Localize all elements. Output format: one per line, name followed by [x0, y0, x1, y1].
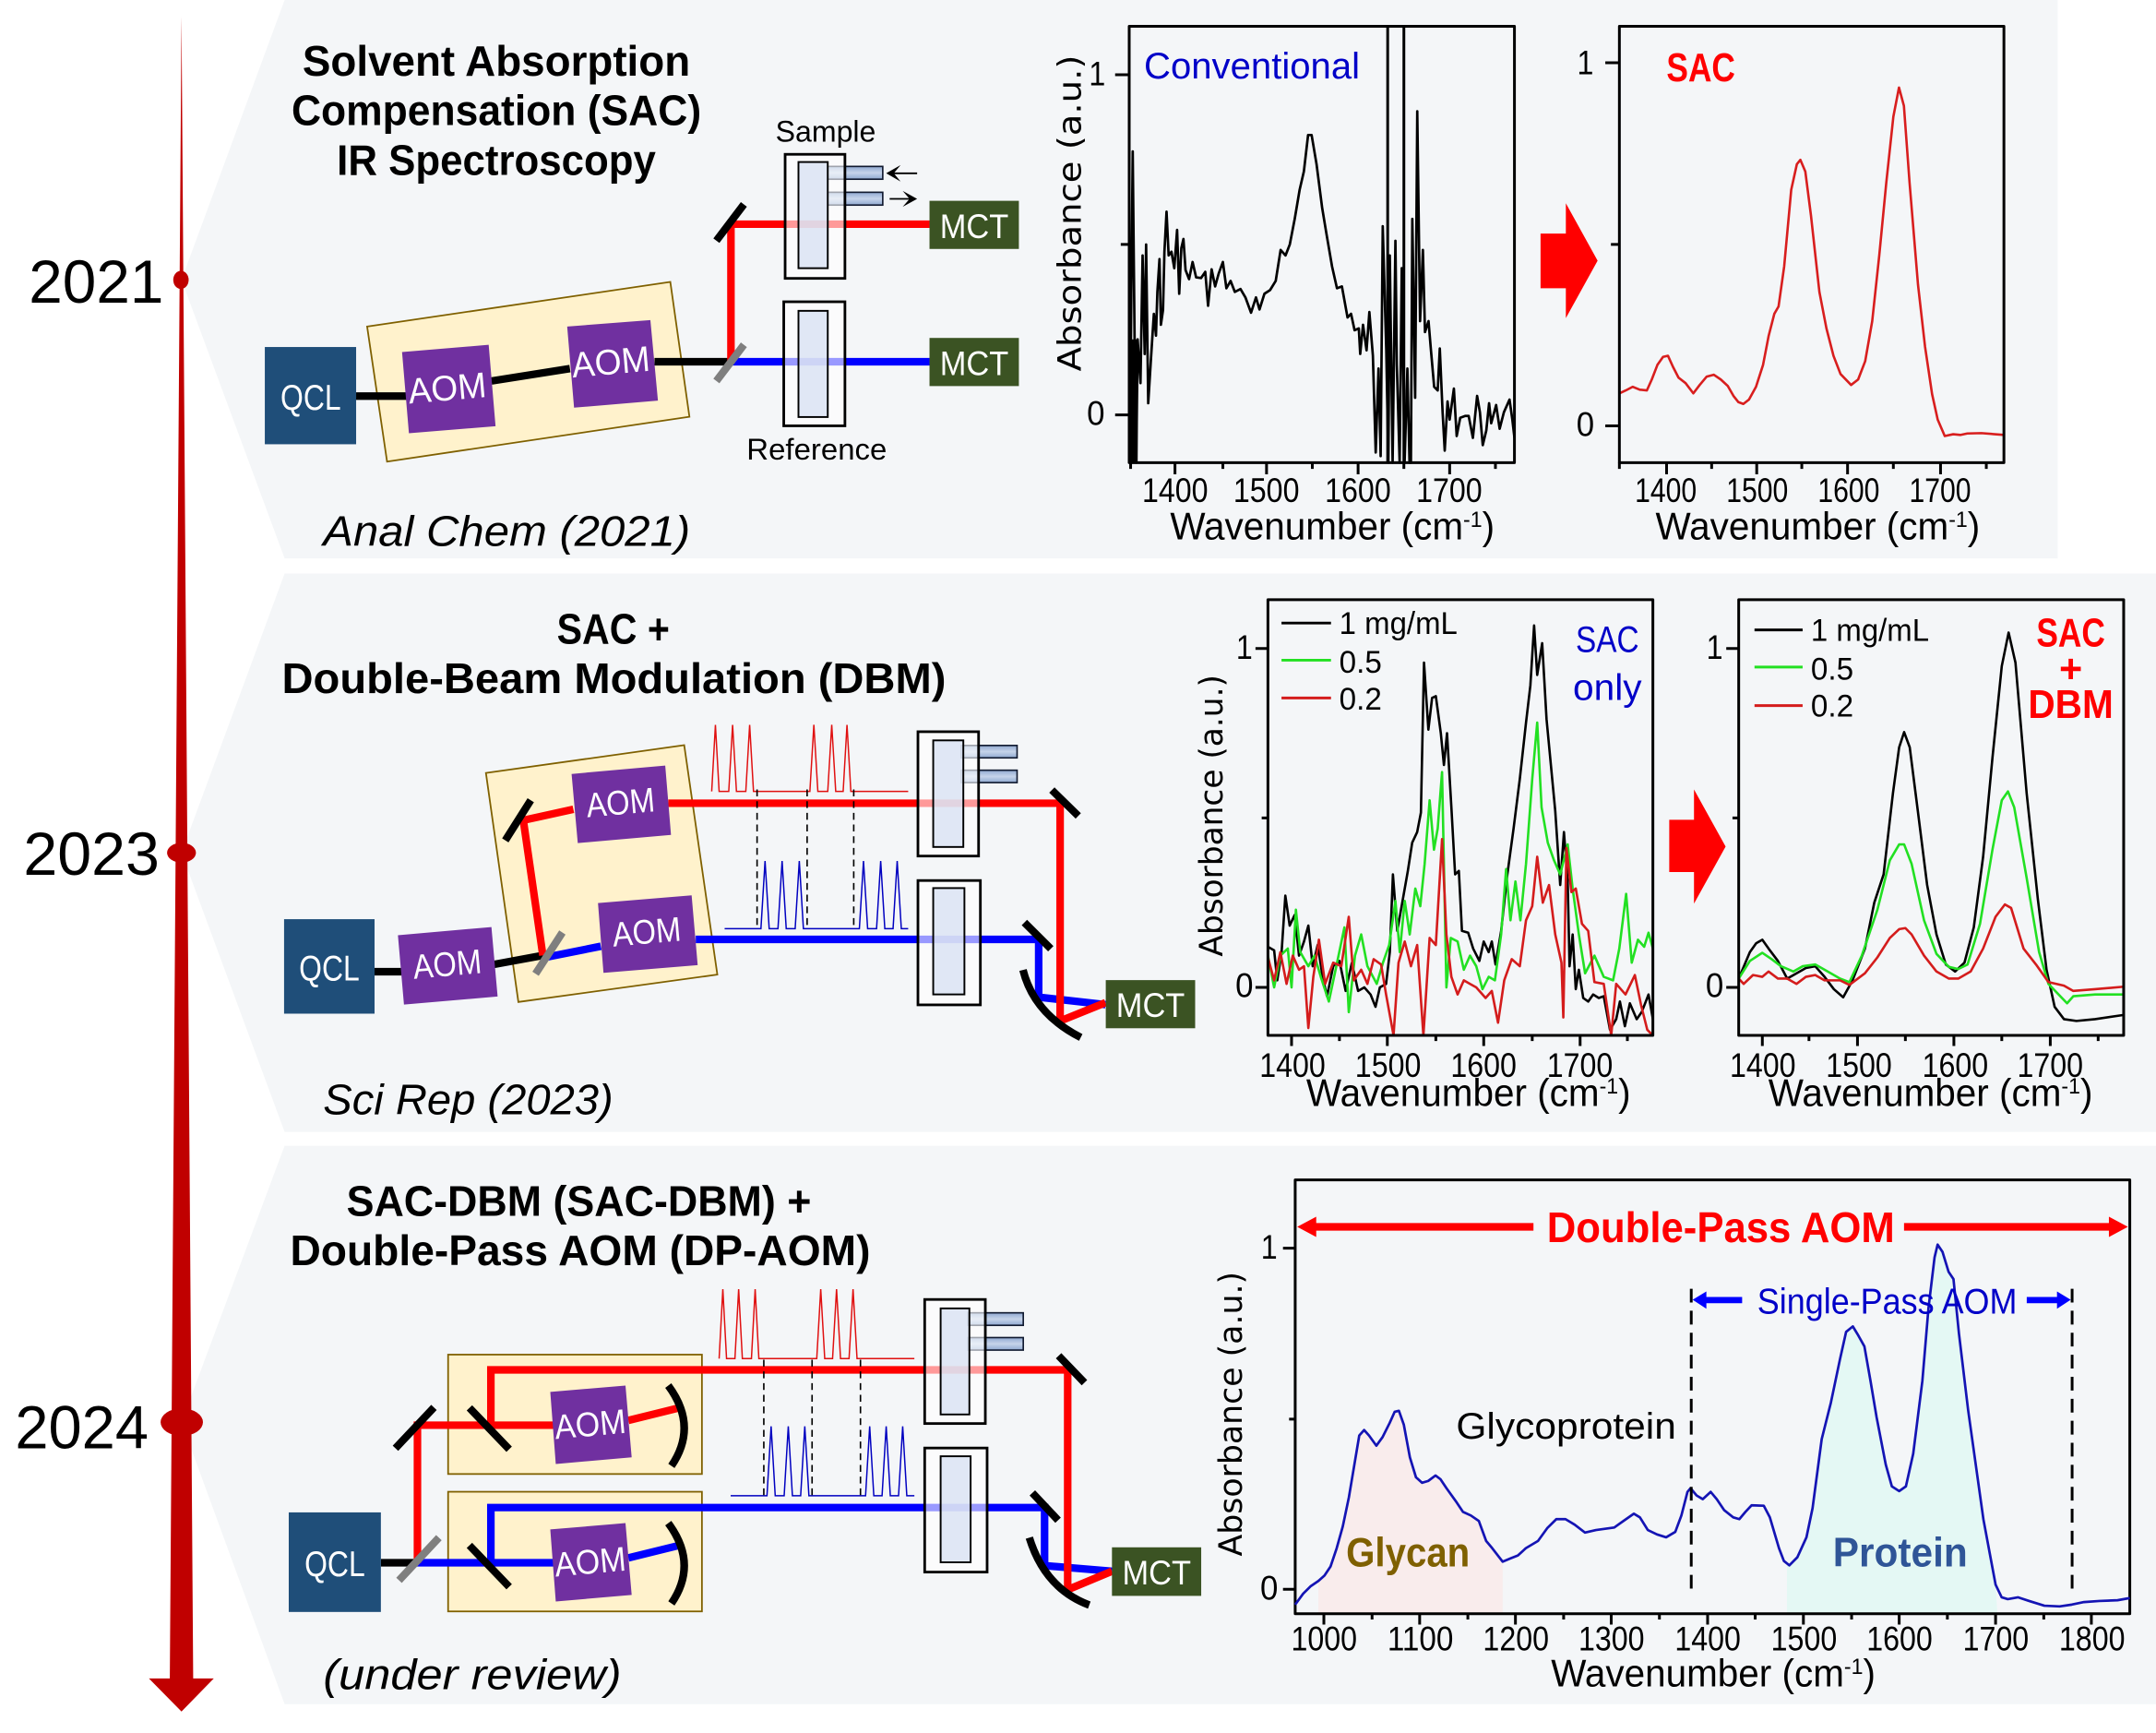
legend [1281, 606, 1458, 717]
legend: 0.5 [1811, 651, 1853, 687]
tick labels: 1400 [1730, 1046, 1796, 1084]
tick labels: 1700 [1547, 1046, 1613, 1084]
MCT detector: MCT [1116, 986, 1185, 1024]
AOM 2 [567, 320, 658, 408]
panel: 2021 background [182, 0, 2057, 558]
AOM enclosure [486, 746, 718, 1002]
tick labels: 1800 [2059, 1619, 2125, 1658]
tick labels: 1700 [1909, 471, 1971, 509]
AOM red arm: AOM [585, 780, 656, 825]
red pulse train [711, 724, 908, 792]
panel 2021 heading: Solvent Absorption [303, 37, 690, 85]
label: SAC + DBM: DBM [2028, 683, 2114, 727]
x axis title: ) [1863, 1651, 1876, 1694]
AOM blue arm: AOM [611, 909, 683, 954]
label: SAC only: SAC [1576, 618, 1639, 660]
QCL source: QCL [280, 378, 341, 418]
arrow: SAC only to SAC + DBM [1669, 790, 1725, 903]
chart: Conventional [1052, 26, 1515, 547]
AOM first [398, 927, 497, 1005]
panel 2024 heading: SAC-DBM (SAC-DBM) + [347, 1177, 811, 1225]
AOM first: AOM [411, 941, 483, 986]
x axis title: -1 [1463, 508, 1483, 532]
MCT detector bottom: MCT [940, 343, 1008, 382]
label: Conventional: Conventional [1144, 45, 1360, 87]
panel 2021 heading [292, 37, 701, 184]
tick labels: 1700 [1963, 1619, 2029, 1658]
label: Glycan: Glycan [1346, 1531, 1470, 1576]
tick labels: 1600 [1866, 1619, 1933, 1658]
panel 2024 heading: Double-Pass AOM (DP-AOM) [290, 1226, 870, 1274]
tick labels: 1500 [1726, 471, 1788, 509]
tick labels [1260, 1227, 2125, 1658]
panel 2023 heading: Double-Beam Modulation (DBM) [282, 654, 946, 702]
x axis title: ) [1618, 1070, 1631, 1114]
tick labels: 1600 [1325, 471, 1391, 509]
label: Sample: Sample [776, 114, 876, 149]
x axis title: ) [1483, 504, 1495, 547]
tick labels: 1400 [1674, 1619, 1741, 1658]
blue pulse train [731, 1427, 914, 1496]
year 2023: 2023 [23, 820, 160, 888]
tick labels: 0 [1235, 966, 1254, 1005]
AOM 1 [402, 345, 495, 434]
tick labels: 1000 [1292, 1619, 1357, 1658]
x axis title: ) [2080, 1070, 2092, 1114]
AOM enclosure [367, 282, 689, 461]
label: SAC only [1573, 618, 1642, 709]
panel 2021 heading: Compensation (SAC) [292, 87, 701, 135]
AOM red arm: AOM [553, 1402, 627, 1446]
chart: SAC [1577, 26, 2004, 547]
sample cuvette [918, 732, 1017, 856]
tick labels: 1 [1089, 54, 1105, 92]
label: SAC: SAC [1666, 46, 1735, 90]
tick labels: 1500 [1355, 1046, 1421, 1084]
reference cuvette [918, 880, 981, 1005]
legend [1755, 614, 1929, 724]
beams [374, 790, 1105, 1037]
tick labels [1087, 54, 1483, 509]
sync dashed guides [764, 1359, 861, 1497]
panel 2024 heading [290, 1177, 870, 1274]
x axis title: -1 [1948, 508, 1968, 532]
tick labels: 1 [1236, 627, 1253, 666]
MCT detector bottom [930, 338, 1018, 386]
label: Protein: Protein [1833, 1531, 1968, 1576]
tick labels [1235, 627, 1613, 1084]
tick labels: 1600 [1817, 471, 1879, 509]
label: Double-Pass AOM: Double-Pass AOM [1547, 1203, 1895, 1251]
QCL source [284, 919, 375, 1013]
x axis title: ) [1968, 504, 1980, 547]
MCT detector top: MCT [940, 207, 1008, 245]
sample cuvette [924, 1299, 1023, 1424]
tick labels: 0 [1706, 966, 1723, 1005]
tick labels: 0 [1577, 404, 1594, 443]
tick labels: 1100 [1388, 1619, 1453, 1658]
AOM 2: AOM [570, 340, 651, 386]
AOM enclosure top [448, 1355, 702, 1474]
optical diagram: SAC [265, 114, 1018, 466]
timeline marker 2023 [167, 843, 196, 863]
label: Reference: Reference [746, 432, 887, 466]
sample cuvette [785, 154, 883, 279]
x axis title: Wavenumber (cm [1170, 504, 1472, 547]
citation: under review: (under review) [323, 1650, 622, 1698]
citation: Anal Chem: Anal Chem (2021) [320, 508, 690, 556]
tick labels: 1700 [2017, 1046, 2083, 1084]
tick labels: 1 [1261, 1227, 1278, 1266]
label: SAC + DBM: + [2059, 647, 2082, 691]
QCL source: QCL [304, 1545, 365, 1584]
spectrum line [1295, 1245, 2130, 1607]
MCT detector top [930, 201, 1018, 249]
x axis title: Wavenumber (cm [1306, 1070, 1609, 1114]
QCL source [265, 347, 356, 444]
AOM blue arm: AOM [553, 1539, 627, 1584]
chart: glycoprotein spectrum [1213, 1180, 2130, 1694]
optical diagram: double-pass AOM [289, 1289, 1201, 1612]
MCT detector [1112, 1548, 1201, 1596]
boundary dashed lines [1691, 1289, 2072, 1591]
QCL source [289, 1512, 381, 1612]
label: SAC + DBM [2028, 612, 2114, 727]
chart: SAC + DBM [1706, 600, 2124, 1114]
timeline marker 2024 [161, 1408, 203, 1436]
label: SAC only: only [1573, 667, 1642, 709]
AOM red arm [550, 1386, 632, 1464]
x axis title: Wavenumber (cm [1655, 504, 1958, 547]
legend: 0.2 [1811, 689, 1853, 724]
blue pulse train [724, 861, 908, 928]
reference cuvette [784, 302, 845, 425]
label: Glycoprotein: Glycoprotein [1456, 1405, 1676, 1447]
tick labels: 1 [1707, 627, 1723, 666]
label: Single-Pass AOM: Single-Pass AOM [1757, 1282, 2017, 1321]
optical diagram: SAC + DBM [284, 724, 1195, 1037]
tick labels: 0 [1260, 1568, 1278, 1607]
legend: 1 mg/mL [1340, 606, 1458, 641]
tick labels: 1500 [1771, 1619, 1837, 1658]
panel: 2023 background [182, 574, 2156, 1132]
tick labels: 1300 [1578, 1619, 1645, 1658]
AOM 1: AOM [407, 365, 488, 412]
x axis title: -1 [2061, 1074, 2080, 1099]
x axis title: -1 [1844, 1655, 1863, 1679]
AOM blue arm [550, 1524, 632, 1602]
tick labels: 1400 [1142, 471, 1208, 509]
panel 2023 heading: SAC + [557, 605, 670, 653]
shaded region: glycan [1318, 1411, 1503, 1614]
tick labels: 1600 [1923, 1046, 1988, 1084]
legend: 1 mg/mL [1811, 614, 1929, 649]
x axis title: Wavenumber (cm [1551, 1651, 1853, 1694]
legend: 0.2 [1340, 682, 1382, 717]
beams [381, 1356, 1112, 1605]
tick labels: 0 [1087, 394, 1105, 433]
tick labels: 1400 [1635, 471, 1697, 509]
QCL source: QCL [299, 950, 360, 989]
beams [356, 204, 930, 396]
MCT detector [1106, 980, 1195, 1028]
x axis title: Wavenumber (cm [1769, 1070, 2070, 1114]
flow arrows [887, 165, 917, 207]
red pulse train [719, 1289, 914, 1358]
AOM blue arm [598, 895, 697, 973]
citation: Sci Rep: Sci Rep (2023) [323, 1075, 613, 1123]
tick labels: 1500 [1826, 1046, 1892, 1084]
shaded region: protein [1787, 1245, 1997, 1614]
label: SAC + DBM: SAC [2036, 612, 2105, 656]
sync dashed guides [757, 790, 853, 928]
year 2021: 2021 [29, 248, 163, 316]
tick labels: 1500 [1233, 471, 1299, 509]
arrow: conventional to SAC [1541, 203, 1598, 318]
AOM red arm [572, 766, 671, 843]
panel: 2024 background [182, 1146, 2156, 1704]
timeline marker 2021 [173, 270, 188, 289]
tick labels: 1600 [1450, 1046, 1517, 1084]
y axis title: Absorbance (a.u.) [1213, 1272, 1250, 1556]
x axis title: -1 [1600, 1074, 1618, 1099]
timeline arrow [149, 17, 214, 1712]
tick labels: 1400 [1259, 1046, 1326, 1084]
chart: SAC only [1194, 600, 1653, 1114]
AOM enclosure bottom [448, 1492, 702, 1611]
tick labels: 1200 [1483, 1619, 1549, 1658]
range arrows: double pass [1298, 1217, 2127, 1237]
y axis title: Absorbance (a.u.) [1194, 675, 1231, 957]
reference cuvette [924, 1448, 987, 1572]
tick labels [1706, 627, 2083, 1084]
MCT detector: MCT [1122, 1553, 1191, 1592]
legend: 0.5 [1340, 645, 1382, 680]
tick labels: 1 [1578, 42, 1593, 81]
panel 2023 heading [282, 605, 946, 702]
y axis title: Absorbance (a.u.) [1052, 55, 1089, 371]
year 2024: 2024 [15, 1393, 149, 1461]
panel 2021 heading: IR Spectroscopy [337, 136, 656, 184]
range arrows: single pass [1693, 1292, 2071, 1309]
tick labels: 1700 [1416, 471, 1483, 509]
tick labels [1577, 42, 1971, 509]
